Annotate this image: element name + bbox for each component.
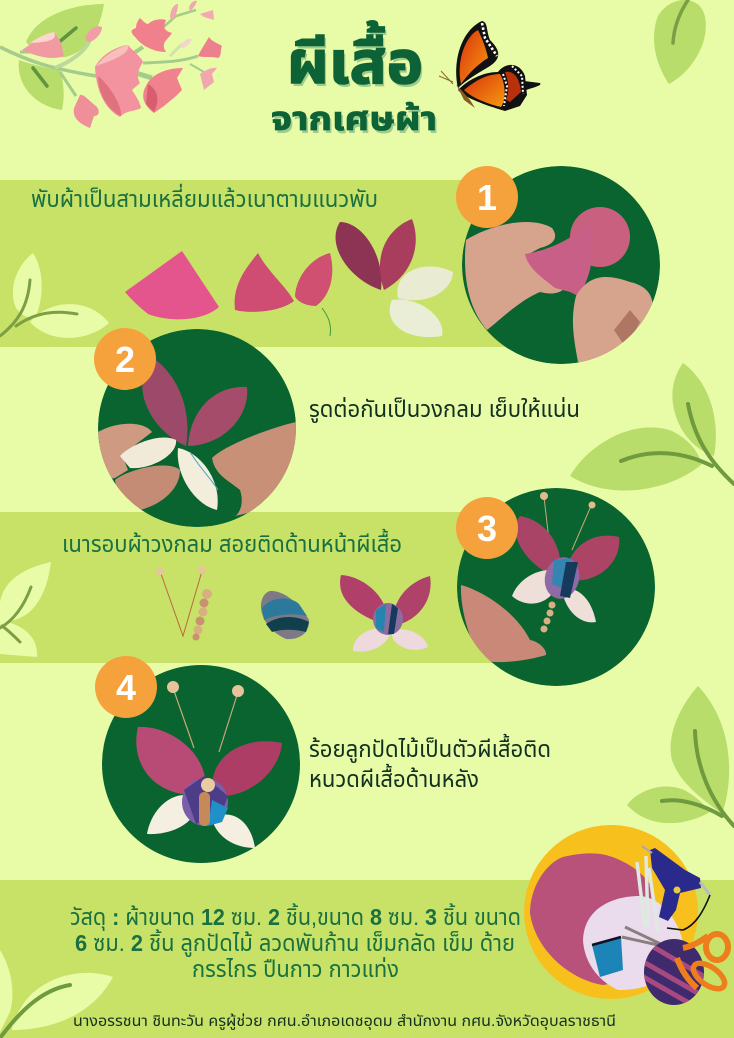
- icon: orange butterfly: [439, 21, 540, 111]
- flower branch illustration: [0, 1, 222, 128]
- big flower: [95, 45, 143, 117]
- band: materials: [0, 880, 734, 1038]
- badge 2: [94, 328, 156, 390]
- one gathered petal: [235, 253, 294, 312]
- step 2 instruction: รูดต่อกันเป็นวงกลม เย็บให้แน่น: [309, 396, 580, 424]
- badge 3: 3: [477, 508, 497, 549]
- title: ผีเสื้อ: [287, 20, 423, 96]
- step 1 fabric samples: [125, 219, 453, 337]
- step 4 instruction: หนวดผีเสื้อด้านหลัง: [309, 763, 479, 792]
- step 4 instruction: [309, 733, 551, 792]
- leaves: lower right: [627, 686, 734, 826]
- upper flower: [132, 18, 172, 52]
- striped fabric oval: [261, 591, 309, 639]
- materials collage: [524, 825, 729, 1015]
- step 3 samples: [156, 566, 431, 652]
- step 4 instruction: ร้อยลูกปัดไม้เป็นตัวผีเสื้อติด: [309, 733, 551, 764]
- leaf: top right: [654, 0, 706, 84]
- right hand: [573, 277, 653, 362]
- left hand: [465, 222, 568, 330]
- band: step 1: [0, 180, 560, 347]
- subtitle: จากเศษผ้า: [271, 100, 437, 137]
- badge 3: [456, 497, 518, 559]
- badge 4: 4: [116, 667, 136, 708]
- assembled butterfly: [340, 575, 431, 652]
- finished petals: [336, 222, 381, 290]
- credit line: นางอรรชนา ชินทะวัน ครูผู้ช่วย กศน.อำเภอเดชอุดม สำนักงาน กศน.จังหวัดอุบลราชธานี: [73, 1012, 616, 1030]
- materials text: กรรไกร ปืนกาว กาวแท่ง: [192, 956, 399, 982]
- badge 1: [456, 166, 518, 228]
- left bud: [22, 32, 64, 58]
- title: ผีเสื้อ: [289, 23, 425, 99]
- step 4 photo: [102, 665, 300, 863]
- leaves: band 2 left: [0, 562, 51, 657]
- bottom bud: [74, 95, 99, 128]
- two gathered petals: [295, 253, 332, 306]
- band: step 3: [0, 512, 560, 663]
- leaves: top left: [19, 4, 104, 110]
- step 3 instruction: เนารอบผ้าวงกลม สอยติดด้านหน้าผีเสื้อ: [62, 528, 402, 557]
- materials text: [70, 902, 521, 982]
- right flower: [143, 68, 183, 113]
- materials text: 6 ซม. 2 ชิ้น ลูกปัดไม้ ลวดพันก้าน เข็มกลัด เข็ม ด้าย: [75, 928, 515, 958]
- fabric quarter circle: [125, 251, 219, 319]
- badge 4: [95, 656, 157, 718]
- badge 2: 2: [115, 339, 135, 380]
- step 2 photo: [98, 329, 296, 527]
- small bud: [85, 26, 102, 42]
- leaves: bottom left: [0, 950, 113, 1038]
- materials text: วัสดุ : ผ้าขนาด 12 ซม. 2 ชิ้น,ขนาด 8 ซม. 3 ชิ้น ขนาด: [70, 902, 521, 931]
- step 1 instruction: พับผ้าเป็นสามเหลี่ยมแล้วเนาตามแนวพับ: [31, 183, 378, 212]
- badge 1: 1: [477, 177, 497, 218]
- step 3 photo: [457, 488, 655, 686]
- leaves: right middle: [570, 363, 734, 491]
- fabric in hand: [525, 238, 591, 296]
- small top buds: [170, 4, 178, 20]
- leaves: band 1 left: [0, 253, 109, 338]
- wire antennae and beads: [156, 566, 212, 640]
- subtitle: จากเศษผ้า: [273, 103, 439, 140]
- step 1 photo: [462, 166, 660, 364]
